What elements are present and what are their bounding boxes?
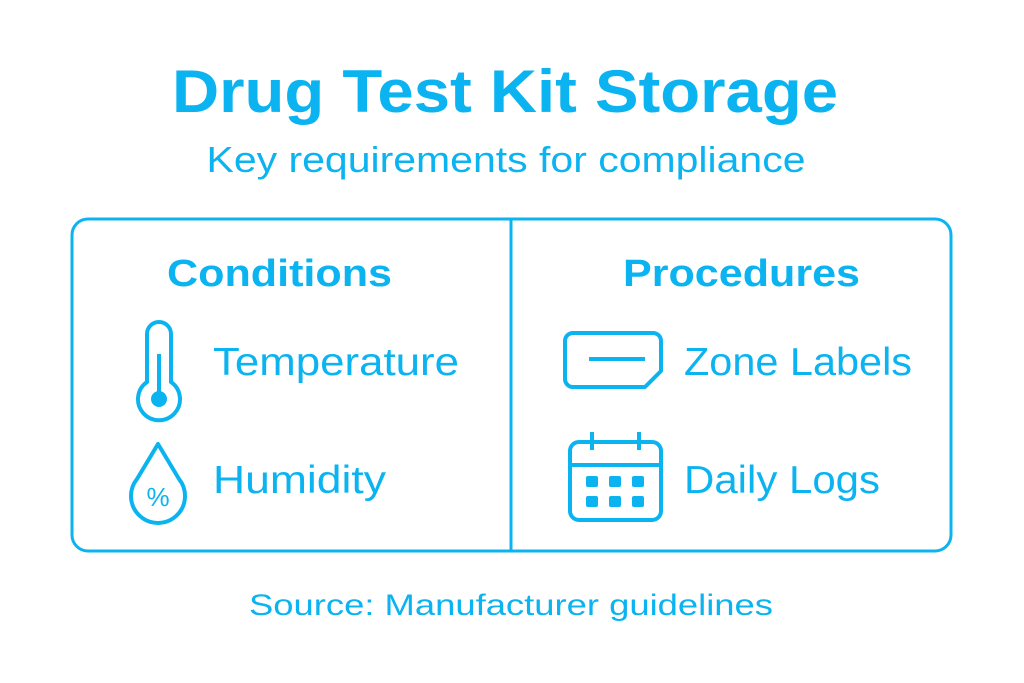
panel: procedures bbox=[565, 253, 912, 520]
source note: Source: Manufacturer guidelines bbox=[249, 589, 773, 622]
text: daily logs: Daily Logs bbox=[684, 459, 880, 502]
text: temperature: Temperature bbox=[213, 341, 459, 384]
icon: zone label tag bbox=[565, 333, 661, 387]
heading: conditions: Conditions bbox=[167, 253, 392, 295]
panel: requirements bbox=[72, 219, 951, 551]
panel: conditions bbox=[131, 253, 459, 523]
icon: humidity drop bbox=[131, 444, 185, 523]
heading: procedures: Procedures bbox=[623, 253, 860, 295]
icon: humidity drop: % bbox=[146, 482, 170, 512]
subtitle: Key requirements for compliance bbox=[206, 139, 806, 180]
text: humidity: Humidity bbox=[213, 459, 387, 502]
text: zone labels: Zone Labels bbox=[684, 341, 912, 384]
title: Drug Test Kit Storage bbox=[172, 58, 838, 125]
icon: thermometer bbox=[138, 322, 180, 420]
icon: calendar bbox=[570, 432, 661, 520]
